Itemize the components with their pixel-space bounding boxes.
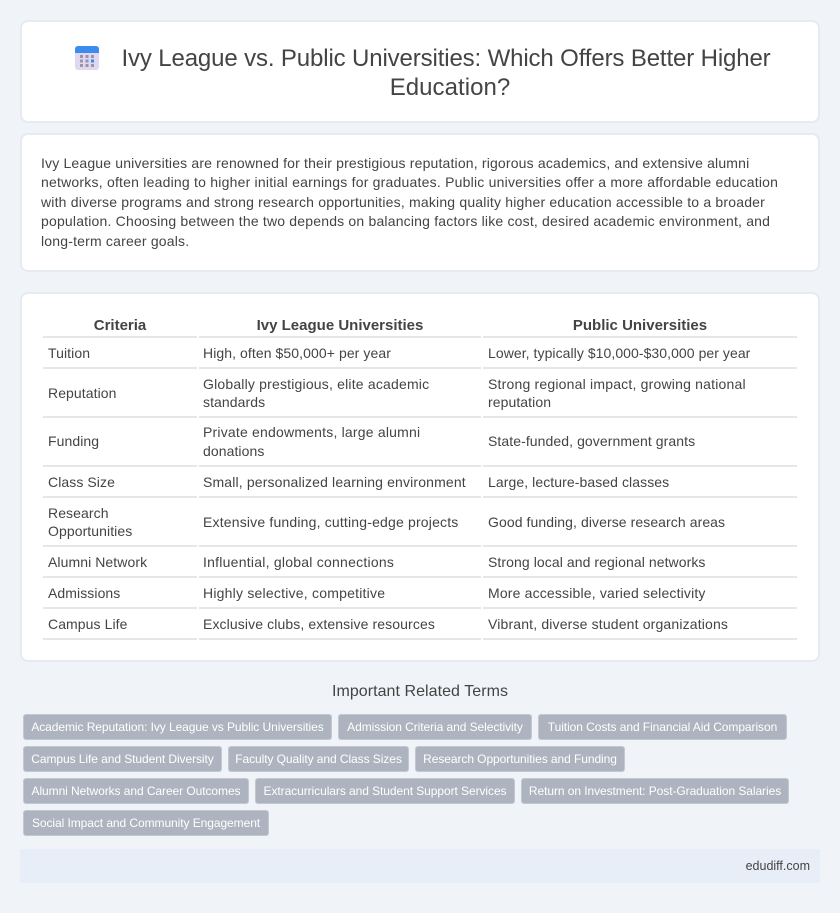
heading: related terms: Important Related Terms <box>332 683 508 700</box>
table: comparison: Criteria <box>94 317 146 334</box>
title <box>121 45 771 100</box>
related term tags: Admission Criteria and Selectivity <box>347 720 523 734</box>
table: comparison: Public Universities <box>573 317 707 334</box>
table: comparison: Tuition <box>48 345 90 361</box>
table: comparison: Highly selective, competitive <box>203 585 385 601</box>
table: comparison: Research <box>48 505 109 521</box>
table: comparison: Strong local and regional networks <box>488 554 706 570</box>
table: comparison: Campus Life <box>48 616 127 632</box>
related term tags: Academic Reputation: Ivy League vs Public Universities <box>31 720 324 734</box>
panel: introduction <box>20 133 820 272</box>
title: Ivy League vs. Public Universities: Which Offers Better Higher <box>121 45 771 72</box>
related term tags: Social Impact and Community Engagement <box>32 816 260 830</box>
table: comparison: Influential, global connections <box>203 554 394 570</box>
table: comparison: Vibrant, diverse student organizations <box>488 616 728 632</box>
related term tags: Research Opportunities and Funding <box>423 752 617 766</box>
panel: comparison table <box>20 292 820 662</box>
table: comparison: Private endowments, large alumni <box>203 424 420 440</box>
table: comparison: Ivy League Universities <box>257 317 423 334</box>
panel: header <box>20 20 820 123</box>
table: comparison: Small, personalized learning environment <box>203 474 466 490</box>
table: comparison: State-funded, government grants <box>488 433 695 449</box>
table: comparison <box>43 317 797 640</box>
table: comparison: Admissions <box>48 585 120 601</box>
table: comparison: Exclusive clubs, extensive resources <box>203 616 435 632</box>
table: comparison: Globally prestigious, elite academic <box>203 376 429 392</box>
table: comparison: donations <box>203 443 264 459</box>
title: Education? <box>390 74 510 100</box>
related term tags <box>23 714 789 836</box>
table: comparison: Alumni Network <box>48 554 147 570</box>
table: comparison: Extensive funding, cutting-edge projects <box>203 514 458 530</box>
text block: introduction: networks, often leading to higher initial earnings for graduates. Public universities offer a more affordable education <box>41 174 778 190</box>
table: comparison: Good funding, diverse research areas <box>488 514 725 530</box>
text block: introduction: Ivy League universities are renowned for their prestigious reputation, rigorous academics, and extensive alumni <box>41 155 749 171</box>
table: comparison: Funding <box>48 433 99 449</box>
table: comparison: Opportunities <box>48 523 132 539</box>
table: comparison: Strong regional impact, growing national <box>488 376 746 392</box>
related term tags: Extracurriculars and Student Support Services <box>264 784 506 798</box>
related term tags: Faculty Quality and Class Sizes <box>235 752 402 766</box>
table: comparison: reputation <box>488 394 551 410</box>
table: comparison: Class Size <box>48 474 115 490</box>
related term tags: Campus Life and Student Diversity <box>31 752 214 766</box>
footer: edudiff.com <box>746 859 810 873</box>
text block: introduction <box>41 155 778 249</box>
text block: introduction: population. Choosing between the two depends on balancing factors like cost, desired academic environment, and <box>41 213 770 229</box>
related term tags: Tuition Costs and Financial Aid Comparison <box>548 720 777 734</box>
text block: introduction: with diverse programs and strong research opportunities, making quality higher education accessible to a broader <box>41 194 765 210</box>
table: comparison: Lower, typically $10,000-$30,000 per year <box>488 345 750 361</box>
related term tags: Return on Investment: Post-Graduation Salaries <box>529 784 781 798</box>
related term tags: Alumni Networks and Career Outcomes <box>32 784 240 798</box>
table: comparison: High, often $50,000+ per year <box>203 345 391 361</box>
icon: calendar <box>75 46 99 70</box>
table: comparison: standards <box>203 394 265 410</box>
footer <box>20 849 820 883</box>
text block: introduction: long-term career goals. <box>41 233 189 249</box>
table: comparison: More accessible, varied selectivity <box>488 585 706 601</box>
table: comparison: Reputation <box>48 385 117 401</box>
table: comparison: Large, lecture-based classes <box>488 474 669 490</box>
